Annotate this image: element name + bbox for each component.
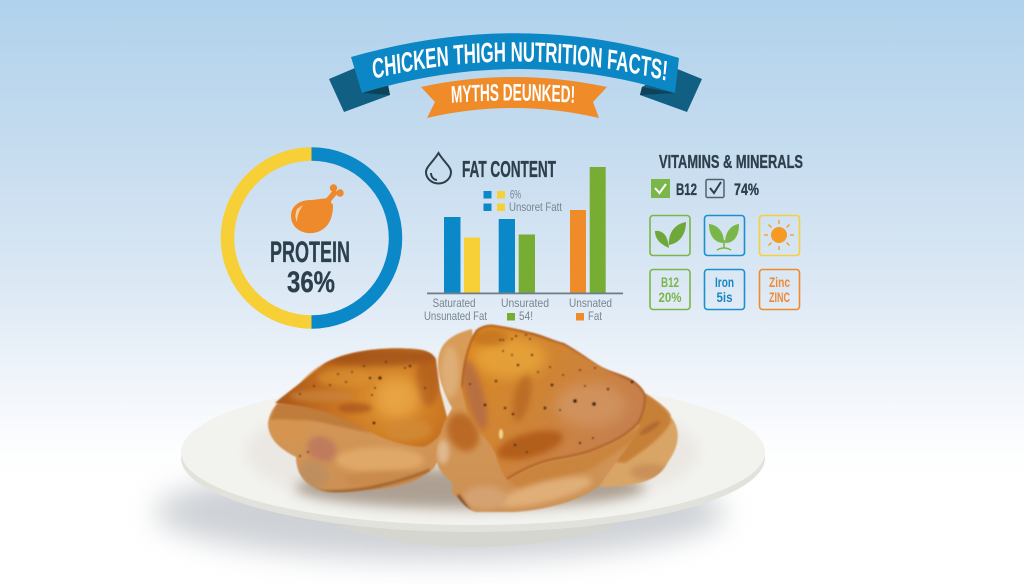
tile: sun (760, 216, 800, 256)
tile: leaf green (650, 216, 690, 256)
chart axis labels: Unsnated (569, 296, 612, 310)
tile: sprout blue (704, 216, 744, 256)
checkbox: B12: B12 (676, 180, 697, 199)
right back lump (599, 392, 679, 488)
right thigh glazed skin (461, 325, 646, 480)
chart axis labels (424, 296, 612, 323)
chart legend: Unsoret Fatt (509, 200, 563, 214)
right chicken thigh body (436, 329, 640, 512)
ribbon left tail (329, 68, 390, 112)
icon: drumstick (291, 184, 344, 233)
chart legend: 6% (510, 188, 521, 202)
ribbon main band (351, 33, 679, 93)
plate rim edge (181, 384, 765, 532)
left chicken thigh (268, 348, 447, 492)
title ribbon (329, 33, 702, 118)
fat content chart panel (424, 153, 623, 323)
checkbox: 74%: 74% (734, 180, 759, 199)
icon: water drop (426, 153, 451, 184)
plate well (246, 390, 698, 514)
roasted chicken thighs (268, 325, 678, 513)
tile: B12 20% (650, 270, 690, 310)
chart axis labels: Unsurated (501, 296, 549, 310)
chart axis labels: Fat (588, 309, 603, 323)
tile: Zinc: ZINC (769, 289, 790, 305)
plate foot (335, 526, 618, 547)
tile: Iron (704, 270, 744, 310)
donut blue half (312, 154, 396, 322)
vitamins heading: VITAMINS & MINERALS (659, 152, 803, 172)
ribbon heading text: CHICKEN THIGH NUTRITION FACTS! (372, 42, 667, 80)
plate cast shadow (155, 464, 725, 560)
tile: B12 20%: B12 (661, 274, 679, 290)
tile: Iron: Iron (715, 274, 734, 290)
subtitle ribbon band (421, 77, 607, 118)
plate rim surface (181, 379, 765, 525)
subtitle text: MYTHS DEUNKED! (452, 84, 574, 103)
vitamins and minerals panel (650, 152, 803, 310)
protein donut panel (228, 154, 396, 322)
protein value: 36% (287, 266, 335, 299)
chart axis labels: Unsunated Fat (424, 309, 488, 323)
plate (155, 379, 765, 560)
chart legend (484, 188, 563, 214)
tile: B12 20%: 20% (658, 289, 682, 305)
chart axis labels: Saturated (432, 296, 476, 310)
bar chart (427, 167, 623, 294)
right thigh skin details (458, 325, 646, 480)
protein label: PROTEIN (270, 236, 350, 269)
tile: Iron: 5is (716, 289, 733, 305)
food contact shadow (295, 468, 645, 508)
chart axis labels: 54! (519, 309, 533, 323)
right thigh highlights (437, 346, 639, 513)
tile: Zinc: Zinc (769, 274, 790, 290)
ribbon right tail (640, 68, 702, 112)
fat content heading: FAT CONTENT (462, 156, 556, 182)
checkbox: B12 (651, 179, 697, 199)
donut yellow half (228, 154, 312, 322)
tile: Zinc (760, 270, 800, 310)
checkbox: 74% (706, 180, 759, 199)
